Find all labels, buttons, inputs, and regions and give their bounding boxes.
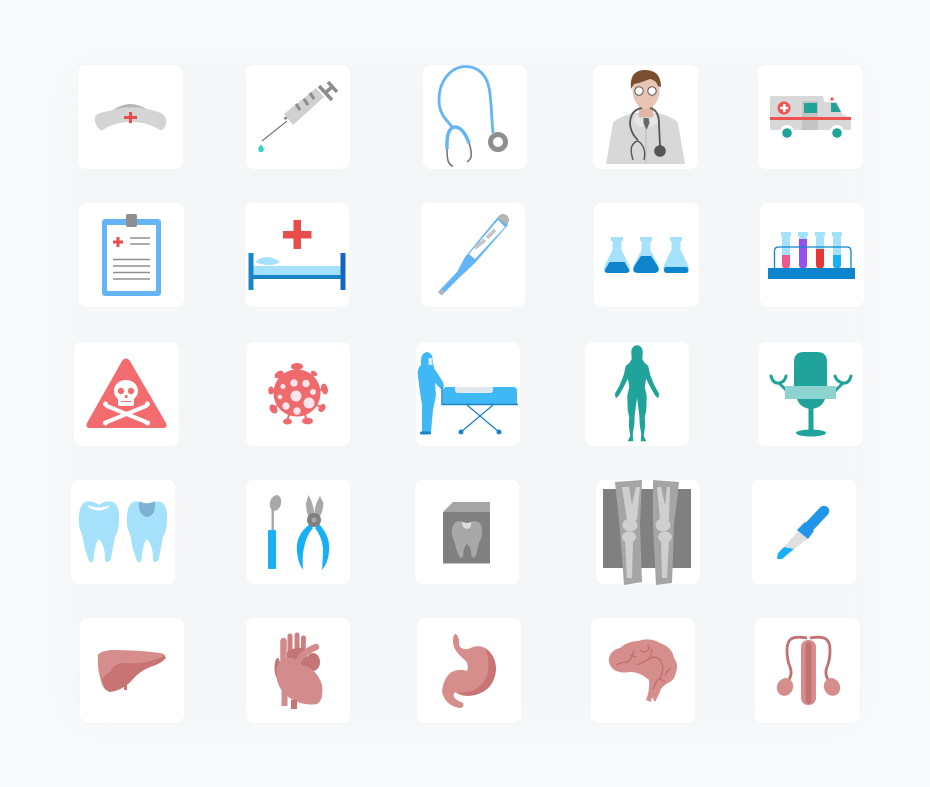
icon: nurse cap	[95, 104, 166, 130]
card: stretcher	[416, 342, 520, 446]
icon: human silhouette	[615, 346, 659, 441]
card: syringe	[246, 64, 350, 170]
icon: person with stretcher	[418, 352, 518, 434]
icon: hospital bed	[248, 220, 346, 290]
icon: dental mirror and pliers	[268, 494, 329, 570]
icon: skull and crossbones triangle	[86, 358, 167, 428]
icon: flasks	[604, 237, 689, 273]
icon: stethoscope	[439, 66, 506, 166]
card: male reproductive anatomy	[754, 618, 860, 724]
icon: virus	[268, 363, 329, 424]
icon: male reproductive anatomy	[774, 637, 843, 705]
card: flasks	[594, 202, 700, 308]
card: brain	[590, 618, 696, 724]
icon: syringe	[258, 82, 337, 152]
icon: test tubes	[768, 232, 855, 279]
card: hospital bed	[244, 202, 350, 308]
card: dental tools	[246, 480, 350, 584]
card: stethoscope	[422, 64, 528, 170]
card: human body	[584, 342, 690, 446]
icon: brain	[609, 639, 677, 702]
card: medical chair	[758, 342, 864, 446]
card: thermometer	[420, 202, 526, 308]
icon: knee x-ray	[603, 480, 691, 585]
icon: dropper	[777, 511, 824, 559]
card: stomach	[416, 618, 522, 724]
card: knee x-ray	[596, 480, 700, 585]
card: ambulance	[758, 64, 864, 170]
icon: thermometer	[438, 214, 509, 295]
card: liver	[80, 618, 184, 724]
card: tooth x-ray	[414, 480, 520, 584]
icon: liver	[98, 650, 166, 692]
card: doctor	[592, 64, 698, 170]
card: teeth	[70, 480, 176, 584]
card: clipboard	[78, 202, 184, 308]
icon: ambulance	[770, 96, 851, 139]
card: heart	[246, 618, 350, 724]
icon: medical chair	[771, 352, 851, 436]
card: danger sign	[74, 342, 180, 446]
icon: healthy and decayed teeth	[79, 501, 167, 562]
icon: stomach	[442, 634, 496, 708]
card: virus	[246, 342, 350, 446]
icon: clipboard	[102, 214, 161, 296]
icon: doctor	[606, 70, 685, 164]
card: test tubes	[760, 202, 864, 308]
card: dropper	[752, 480, 856, 584]
card: nurse cap	[78, 64, 184, 170]
icon: tooth x-ray	[443, 502, 490, 564]
icon: anatomical heart	[274, 635, 322, 709]
